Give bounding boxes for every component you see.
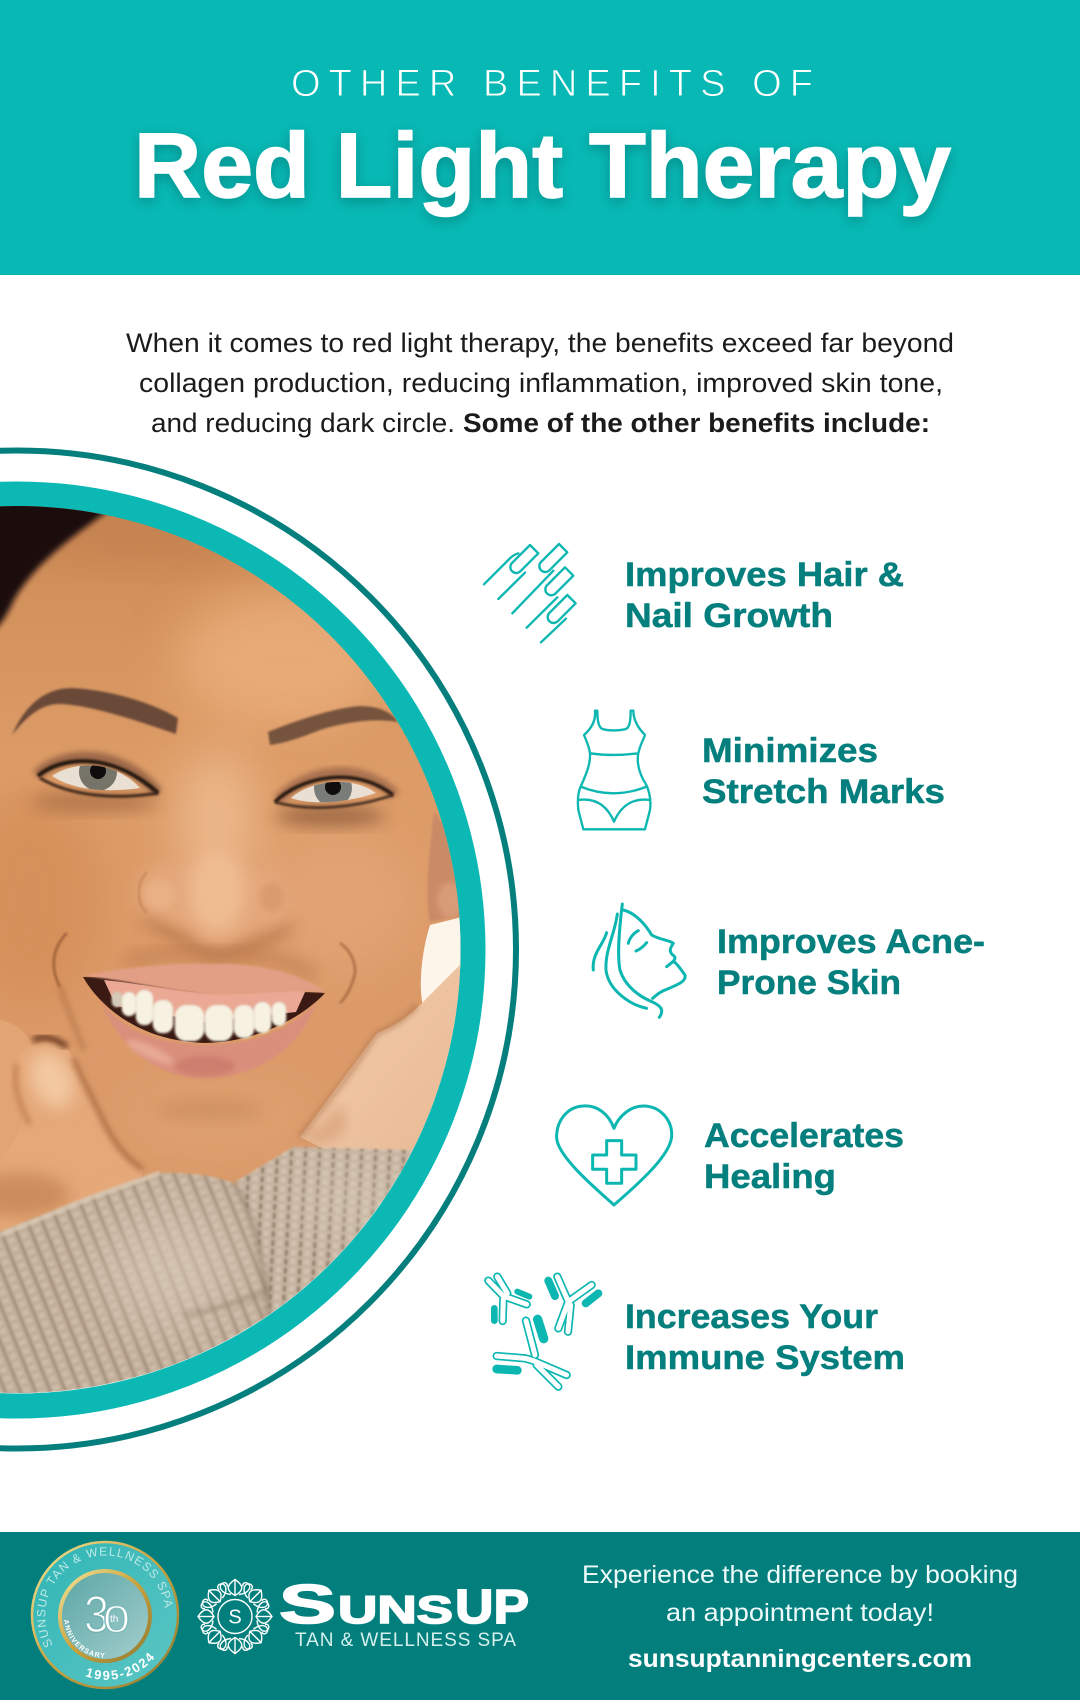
left hand [0, 1020, 143, 1236]
header kicker text: OTHER BENEFITS OF [291, 63, 813, 105]
footer band [0, 1532, 1080, 1700]
call to action: Experience the difference by booking [582, 1561, 1018, 1589]
benefit: accelerates healing [557, 1106, 904, 1205]
teal ring [0, 494, 473, 1406]
upper lip [83, 964, 325, 994]
sweater left cuff [0, 1173, 280, 1400]
benefit: accelerates healing: Accelerates [704, 1117, 904, 1155]
mouth [83, 964, 325, 1078]
spa logo tagline: TAN & WELLNESS SPA [295, 1630, 516, 1651]
spa logo wordmark: S [279, 1573, 336, 1635]
icon: face profile [593, 904, 685, 1017]
spa logo wordmark: UNS [338, 1589, 453, 1632]
smile lines [54, 933, 67, 987]
icon: heart with cross [557, 1106, 672, 1205]
spa logo mandala: S [228, 1606, 242, 1628]
nose [138, 848, 290, 952]
chin shadow [171, 1102, 249, 1118]
30th anniversary badge: 3 [84, 1586, 109, 1644]
spa logo wordmark [279, 1573, 529, 1635]
hair [0, 506, 109, 630]
30th anniversary badge: 1995-2024 [86, 1652, 154, 1680]
outer dark ring [0, 450, 516, 1448]
spa logo wordmark: UP [455, 1581, 529, 1634]
icon: fingernails [484, 544, 576, 642]
benefit: improves acne-prone skin: Improves Acne- [717, 923, 985, 961]
call to action: an appointment today! [666, 1599, 934, 1627]
30th anniversary badge: th [110, 1614, 118, 1625]
eyebrows [12, 688, 398, 745]
benefit: minimizes stretch marks: Minimizes [702, 732, 878, 770]
gum [104, 980, 306, 1022]
skin shading [0, 514, 400, 1001]
mouth interior [83, 977, 325, 1043]
benefit: improves hair and nail growth: Improves Hair & [625, 556, 904, 594]
benefit: improves hair and nail growth [484, 544, 904, 642]
benefit: minimizes stretch marks: Stretch Marks [702, 773, 945, 811]
call to action [582, 1561, 1018, 1673]
header band [0, 0, 1080, 275]
benefit: increases your immune system [488, 1277, 905, 1387]
photo: smiling woman [0, 495, 470, 1400]
30th anniversary badge: 0 [103, 1599, 130, 1641]
ear and background gap [420, 814, 460, 1003]
sweater right cuff [234, 1146, 412, 1320]
benefit: improves acne-prone skin: Prone Skin [717, 964, 901, 1002]
right hand [300, 965, 460, 1152]
call to action: sunsuptanningcenters.com [628, 1645, 972, 1673]
benefit: improves hair and nail growth: Nail Growth [625, 597, 833, 635]
spa logo mandala [198, 1580, 272, 1654]
benefit: minimizes stretch marks [578, 711, 945, 829]
benefit: increases your immune system: Immune System [625, 1339, 905, 1377]
benefit: accelerates healing: Healing [704, 1158, 836, 1196]
30th anniversary badge: ANNIVERSARY [64, 1620, 105, 1658]
intro paragraph: Some of the other benefits include: [463, 408, 930, 438]
30th anniversary badge: SUNSUP TAN & WELLNESS SPA [36, 1547, 172, 1648]
icon: torso [578, 711, 650, 829]
icon: antibodies [488, 1277, 598, 1387]
benefit: increases your immune system: Increases Your [625, 1298, 878, 1336]
intro paragraph [126, 328, 954, 438]
30th anniversary badge [30, 1540, 180, 1690]
lower lip [100, 1000, 316, 1078]
benefit: improves acne-prone skin [593, 904, 985, 1017]
intro paragraph: and reducing dark circle. [151, 408, 455, 438]
philtrum shadow [125, 953, 315, 975]
intro paragraph: collagen production, reducing inflammation, improved skin tone, [139, 368, 943, 398]
teeth [112, 990, 286, 1041]
left eye [30, 753, 160, 812]
portrait circle with rings [0, 450, 516, 1448]
right eye [275, 769, 395, 826]
intro paragraph: When it comes to red light therapy, the benefits exceed far beyond [126, 328, 954, 358]
main title: Red Light Therapy [134, 115, 951, 217]
